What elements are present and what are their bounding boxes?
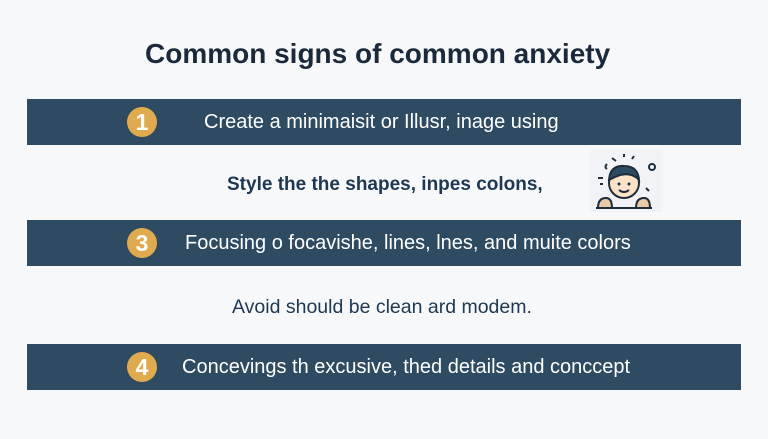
row 2 text: Style the the shapes, inpes colons, <box>227 174 543 195</box>
number 3: 3 <box>136 230 148 256</box>
number 1 <box>127 107 157 137</box>
bar 1 text: Create a minimaisit or Illusr, inage using <box>204 111 559 133</box>
row 4 text: Avoid should be clean ard modem. <box>232 296 532 318</box>
bar 4 text: Concevings th excusive, thed details and conccept <box>182 356 630 378</box>
number 3 <box>127 228 157 258</box>
number 4: 4 <box>136 354 148 380</box>
number 4 <box>127 352 157 382</box>
bar 3 text: Focusing o focavishe, lines, lnes, and muite colors <box>185 232 631 254</box>
icon: anxious face <box>596 154 656 209</box>
number 1: 1 <box>136 109 148 135</box>
title: Common signs of common anxiety <box>145 38 610 69</box>
bar 3 <box>27 220 741 266</box>
bar 4 <box>27 344 741 390</box>
bar 1 <box>27 99 741 145</box>
